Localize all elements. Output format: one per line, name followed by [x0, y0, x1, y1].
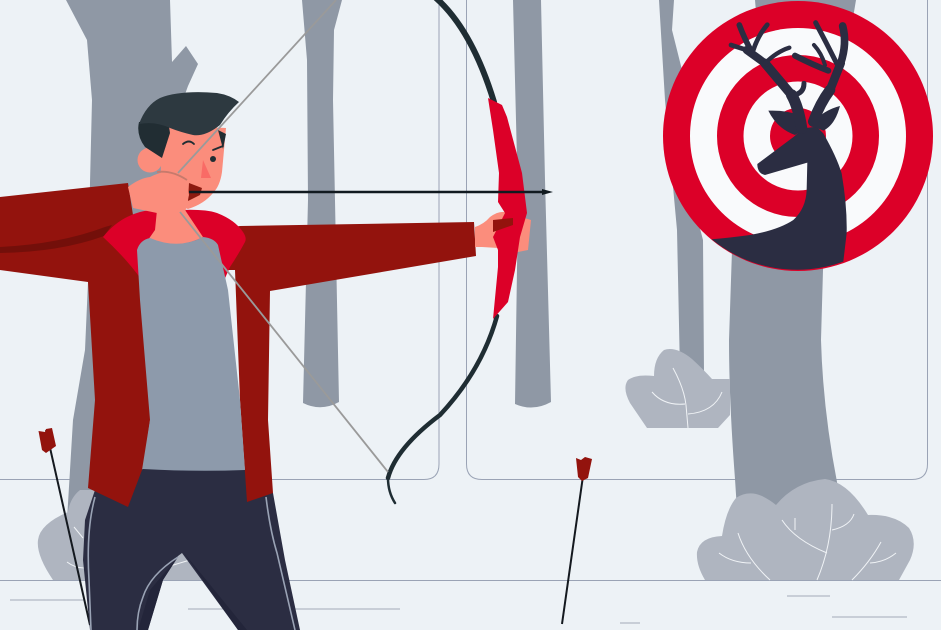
bow riser: [488, 98, 527, 319]
bowstring: [157, 0, 388, 472]
tree: left behind archer: [66, 0, 198, 520]
tree: large target trunk: [729, 0, 856, 510]
stuck arrow: left: [38, 428, 90, 625]
tree: thin behind target: [659, 0, 704, 372]
hand drawing string: [128, 172, 189, 213]
archer: [0, 92, 531, 630]
shirt: [137, 237, 245, 471]
bush: large at base of trunk: [697, 479, 914, 580]
tree: middle left: [302, 0, 342, 407]
bush: left behind archer: [38, 490, 203, 580]
target: concentric rings: [663, 1, 933, 271]
jacket collar: [103, 210, 246, 285]
head: [138, 92, 239, 209]
hand holding bow: [475, 212, 531, 252]
jacket sleeve crease: [0, 225, 112, 253]
grip thumb: [493, 218, 513, 232]
trees: [66, 0, 856, 520]
stuck arrow: centre: [562, 457, 592, 624]
neck: [148, 210, 203, 244]
bow limbs: [388, 0, 497, 503]
bush: small on mid ground: [625, 349, 730, 428]
jacket: back arm and left panel: [0, 183, 160, 507]
deer silhouette: [712, 23, 847, 270]
arrow on bow: [189, 189, 553, 195]
tree: middle right: [513, 0, 551, 408]
trousers: [83, 469, 300, 630]
jacket: body and right arm: [150, 222, 476, 502]
